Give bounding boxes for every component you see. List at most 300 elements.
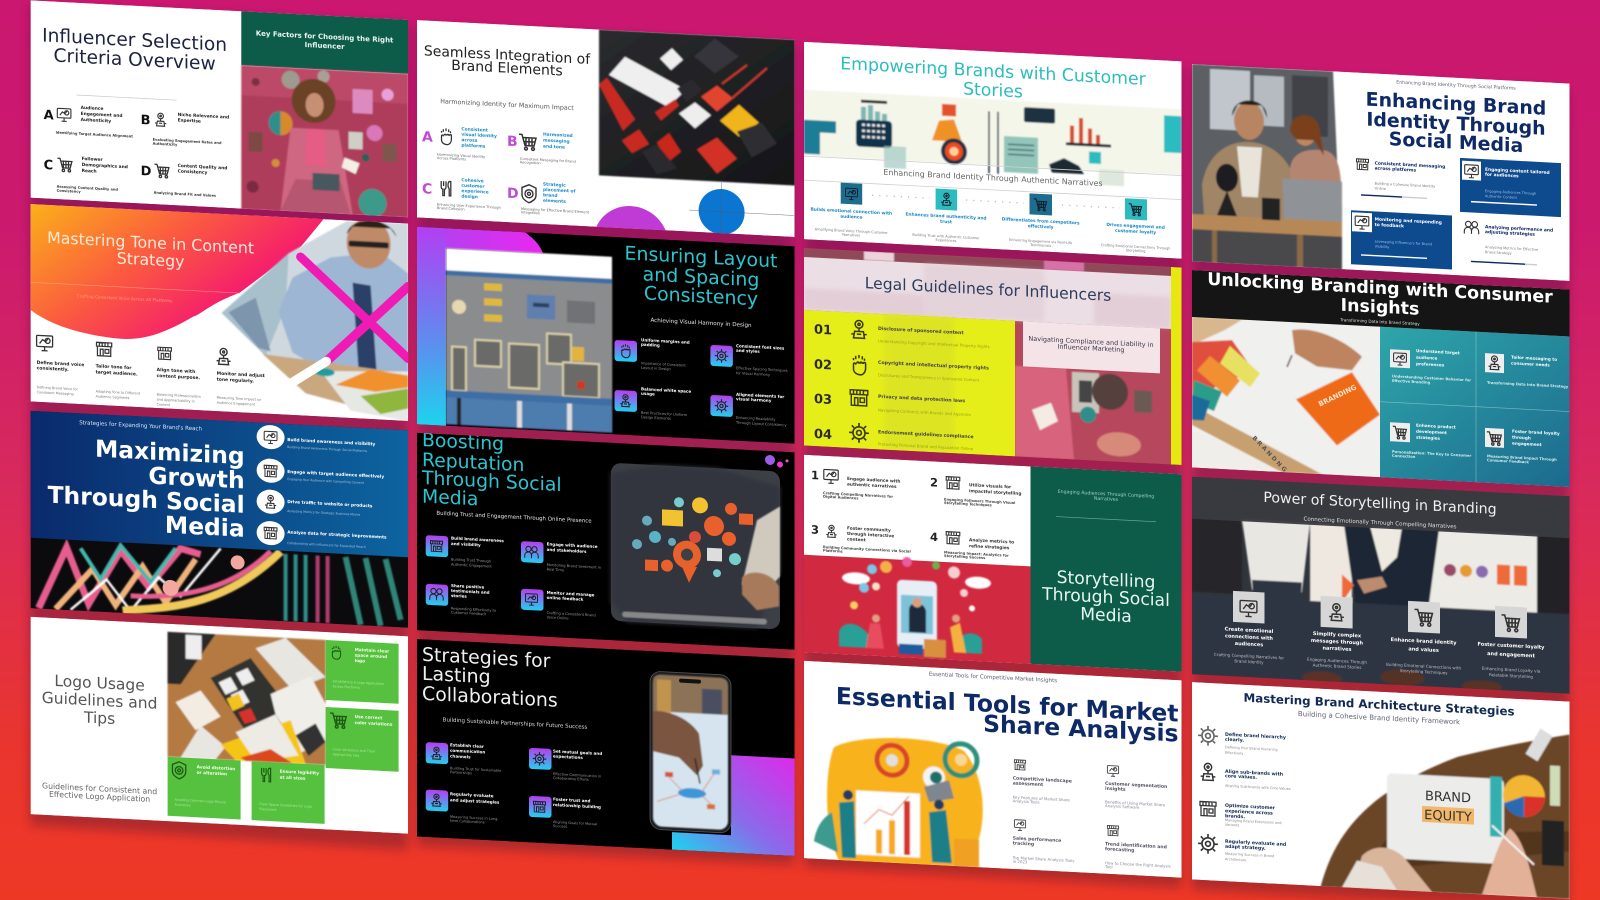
item B: B — [141, 113, 151, 128]
item 3: through interactive — [847, 531, 894, 539]
icon: smiley faces — [162, 555, 245, 596]
slide: Storytelling Through Social Media — [804, 455, 1182, 672]
item 1: Engage audience with — [847, 476, 900, 485]
item 2: Align sub-brands with — [1225, 769, 1283, 778]
item 4: visual harmony — [736, 396, 772, 403]
subtitle: Connecting Emotionally Through Compelling Narratives — [1304, 515, 1457, 530]
item 2 — [529, 747, 602, 783]
card 3: Leveraging Influencers for Brand — [1375, 239, 1432, 246]
decorative corner gradient — [672, 752, 794, 856]
card: maintain clear space: Establishing A Logo Application — [333, 679, 384, 686]
item 2 — [1105, 765, 1167, 811]
item D: Analyzing Brand Fit and Values — [154, 191, 216, 198]
title: Mastering Brand Architecture Strategies — [1244, 691, 1514, 719]
item A — [44, 103, 133, 139]
icon: store — [96, 342, 112, 356]
item D: elements — [543, 198, 566, 205]
item 2: Simplify complex — [1313, 631, 1362, 639]
card 4: adjusting strategies — [1485, 229, 1535, 238]
photo: faded influencer background — [804, 248, 1182, 465]
item 1: Authentic Engagement — [451, 562, 492, 569]
row 03: Navigating Contracts with Brands and Agencies — [878, 407, 971, 417]
item 2: and stakeholders — [547, 547, 587, 554]
item 1: Key Features of Market Share — [1013, 794, 1070, 802]
slide: Strategies for Lasting Collaborations — [417, 639, 794, 856]
item 1: connections with — [1225, 633, 1273, 642]
item 3: Personalization: The Key to Consumer — [1392, 450, 1471, 458]
row 04: Protecting Personal Brand and Reputation Online — [878, 441, 974, 451]
title: Strategies for — [422, 644, 551, 672]
row 03: Privacy and data protection laws — [878, 394, 965, 404]
title: Empowering Brands with Customer — [840, 54, 1147, 90]
icon: monitor — [1107, 765, 1119, 777]
band lines — [804, 156, 1182, 200]
title: Logo Usage — [54, 672, 145, 695]
item B: Niche Relevance and — [178, 112, 229, 121]
item C: Brand Cohesion — [437, 206, 465, 211]
item 3: Responding Effectively to — [451, 606, 496, 613]
header band — [1192, 477, 1570, 538]
item 3 — [1002, 192, 1080, 249]
icon: gear with bulb — [1198, 833, 1218, 854]
slide: Empowering Brands with Customer Stories — [804, 42, 1182, 259]
item 2 — [905, 187, 987, 245]
item 4: Measuring Success in Brand — [1225, 852, 1274, 858]
item 1: Uniform margins and — [641, 337, 690, 345]
item 4: Measuring Tone Impact on — [217, 396, 261, 402]
item 4 — [529, 795, 601, 831]
item 3: Drive traffic to website or products — [287, 499, 373, 509]
icon: shield — [522, 184, 536, 203]
subtitle: Enhancing Brand Identity Through Authentic Narratives — [883, 168, 1103, 188]
icon tile: gear — [529, 748, 552, 770]
item 4: Relatable Storytelling — [1489, 672, 1533, 679]
item 1 — [1198, 725, 1286, 758]
slide: Essential Tools for Market Share Analysis — [804, 661, 1182, 878]
subtitle: Building Trust and Engagement Through Online Presence — [436, 510, 592, 525]
accent strip — [1171, 267, 1182, 465]
item 1: Building Brand Awareness Through Social Platforms — [287, 445, 368, 453]
decorative gradient edges — [417, 227, 543, 431]
title: Insights — [1341, 296, 1419, 320]
card 1: Online — [1375, 186, 1386, 191]
icon tile: gear — [710, 345, 733, 367]
item C: Cohesive — [461, 177, 484, 184]
dotted connectors — [872, 195, 1120, 208]
item B — [507, 130, 576, 167]
icon cluster: social media icons — [632, 494, 753, 586]
item A: across — [461, 138, 478, 144]
item 3: Customer Feedback — [451, 610, 487, 616]
card: color variations: color variations — [355, 720, 393, 728]
item 1: Builds emotional connection with — [810, 207, 892, 217]
panel: yellow list — [804, 310, 1015, 456]
illustration: machines and charts — [804, 90, 1182, 189]
icon: hand — [854, 355, 866, 375]
item 3: Share positive — [451, 583, 484, 590]
icon: pin — [217, 348, 231, 365]
title: Media — [1080, 604, 1132, 627]
subtitle: Building Sustainable Partnerships for Future Success — [443, 716, 587, 731]
item D: Integration — [521, 210, 540, 215]
icon: store — [1014, 760, 1026, 770]
subtitle: Transforming Data Into Brand Strategy — [1339, 317, 1420, 326]
item 4: through — [1512, 435, 1531, 441]
item 2 — [256, 458, 384, 484]
card: avoid distortion — [168, 757, 241, 820]
photo: branding mockup — [1192, 317, 1380, 477]
item 3 — [426, 582, 496, 617]
callout: compliance box — [1023, 321, 1160, 373]
title: Media — [165, 511, 245, 543]
icon: cart — [57, 158, 72, 172]
item 1: authentic narratives — [847, 481, 897, 490]
item 3: and adjust strategies — [450, 797, 500, 805]
icon: people — [1464, 221, 1479, 234]
slide: Mastering Brand Architecture Strategies — [1192, 682, 1570, 900]
panel heading: Influencer — [305, 41, 345, 51]
card: ensure legibility: Clear Space Guidelines for Logo — [259, 802, 312, 809]
icon: hand — [442, 128, 451, 145]
title: Tips — [83, 708, 115, 728]
item 3: experience across — [1225, 808, 1273, 817]
icon: shirt — [850, 390, 868, 406]
item 2 — [710, 342, 788, 378]
card: color variations: Color Variations and Their — [333, 747, 376, 754]
item 4: customer loyalty — [1115, 228, 1156, 236]
title: Reputation — [422, 450, 524, 476]
item 4: Crafting Emotional Connections Through — [1101, 243, 1170, 251]
item 1: Defining Your Brand Hierarchy — [1225, 745, 1278, 752]
eyebrow: Essential Tools for Competitive Market Insights — [929, 671, 1057, 684]
card 1: Building a Cohesive Brand Identity — [1375, 181, 1435, 189]
item 1: clearly. — [1225, 737, 1244, 744]
item 1 — [614, 336, 690, 372]
item A — [422, 124, 497, 163]
subtitle: Building a Cohesive Brand Identity Framework — [1298, 710, 1461, 726]
item 2: narratives — [1323, 645, 1352, 653]
title: Through Social — [1041, 584, 1170, 611]
item 3 — [426, 789, 500, 825]
item 2: Benefits of Using Market Share — [1105, 799, 1166, 807]
item 1: Establish clear — [450, 742, 484, 749]
row 02: Disclosures and Transparency in Sponsored Content — [878, 372, 980, 383]
item D: Content Quality and — [178, 163, 227, 171]
title: Legal Guidelines for Influencers — [865, 274, 1111, 305]
icon tile: monitor — [1233, 591, 1264, 623]
panel: blue header — [31, 411, 408, 557]
item 4 — [217, 348, 266, 407]
icon tile: pin — [426, 789, 448, 812]
item 3: Measuring Success in Long- — [450, 815, 499, 821]
card: color variations: Use correct — [355, 714, 382, 721]
item 3: Top Market Share Analysis Tools — [1012, 855, 1074, 863]
icon: store — [158, 347, 171, 360]
card 4: Brand Strategy — [1485, 250, 1512, 256]
item 2: and styles — [736, 348, 760, 354]
card: avoid distortion: or alteration — [197, 770, 227, 777]
slide: Legal Guidelines for Influencers — [804, 248, 1182, 465]
item 4: Storytelling — [1126, 248, 1145, 253]
card 4 — [1464, 221, 1553, 266]
item 3: Foster community — [847, 525, 891, 534]
eyebrow: Enhancing Brand Identity Through Social Platforms — [1396, 80, 1516, 92]
item 2: Effective Communication in — [553, 772, 601, 779]
item 3 — [1390, 421, 1471, 462]
item 3: Testimonials — [1029, 243, 1051, 248]
item 2: trust — [940, 219, 952, 225]
item 3: 3 — [811, 523, 819, 537]
photo: tablet showing brand equity on wooden table — [1321, 717, 1570, 900]
photo: business team presenting — [1192, 517, 1570, 698]
item D: D — [507, 186, 519, 202]
item 4: Success — [553, 824, 567, 829]
item 4: Aligning Goals for Mutual — [553, 820, 597, 826]
card: maintain clear space: Across Platforms — [333, 684, 360, 690]
item 3: Managing Brand Extensions and — [1225, 818, 1282, 825]
slide: Mastering Tone in Content Strategy — [31, 201, 408, 421]
item 2: Engage with target audience effectively — [287, 469, 384, 480]
photo: man reviewing chart — [222, 211, 408, 421]
item 1: Define brand voice — [37, 360, 84, 368]
title: Ensuring Layout — [625, 242, 777, 272]
item 3: Connection — [1392, 454, 1416, 459]
item 3: term Collaborations — [450, 819, 485, 825]
slide: Enhancing Brand Identity Through Social Media — [1192, 64, 1570, 282]
item 3: Variants — [1225, 823, 1239, 827]
item 2: Tailor messaging to — [1511, 354, 1557, 362]
item A: Harmonizing Visual Identity — [437, 153, 485, 159]
tablet text — [1422, 789, 1474, 826]
item 2: messages through — [1311, 638, 1364, 647]
item 1 — [1390, 347, 1471, 387]
icon: store — [1356, 159, 1368, 170]
item 4: Monitor and adjust — [217, 371, 266, 379]
item 4: Foster trust and — [553, 797, 590, 803]
item 3: content purpose. — [157, 373, 200, 381]
slide: Logo Usage Guidelines and Tips — [31, 617, 408, 834]
item D: Messaging for Effective Brand Element — [521, 207, 590, 214]
icon: fork and knife — [441, 181, 451, 196]
eyebrow: Strategies for Expanding Your Brand's Reach — [79, 419, 203, 433]
item 4: Architecture — [1225, 857, 1246, 862]
item 2: for Visual Harmony — [736, 371, 770, 377]
icon: shield — [172, 761, 186, 779]
item 3 — [157, 347, 201, 409]
item B: Expertise — [178, 117, 201, 125]
row 02: Copyright and intellectual property rights — [878, 360, 989, 372]
photo: stationery flat lay — [599, 29, 795, 186]
title: Social Media — [1389, 128, 1523, 157]
item 1: 1 — [811, 468, 819, 482]
item 3: Content — [157, 403, 171, 407]
item 4: 4 — [930, 530, 938, 544]
item B: Consistent Messaging for Brand — [520, 157, 576, 164]
item A: Across Platforms — [437, 156, 466, 162]
subtitle: Achieving Visual Harmony in Design — [650, 317, 752, 329]
item A: A — [44, 108, 54, 123]
item 2: insights — [1105, 786, 1126, 793]
item 1: Competitive landscape — [1013, 775, 1072, 785]
item 2 — [521, 540, 601, 574]
subtitle: Guidelines for Consistent and — [42, 781, 157, 796]
item 4: engagement — [1512, 441, 1542, 447]
item B: Evaluating Engagement Rates and — [153, 138, 222, 145]
icon: monitor — [1014, 820, 1026, 831]
item 3: and Approachability in — [157, 398, 195, 403]
slide: Seamless Integration of Brand Elements — [417, 20, 795, 291]
row 01: Disclosure of sponsored content — [878, 326, 964, 336]
label on paper: BRANDNG — [1251, 435, 1289, 475]
item 4: Tool — [1104, 864, 1113, 869]
item 3: content — [847, 536, 866, 543]
item 4: Foster customer loyalty — [1478, 641, 1545, 651]
icon: gear — [849, 422, 869, 443]
item C — [422, 175, 501, 213]
icon tile: cart — [1390, 422, 1410, 442]
icon tile: monitor — [1390, 349, 1410, 368]
item 1: audience — [1416, 355, 1438, 361]
item 2: Engaging Followers Through Visual — [944, 497, 1015, 505]
item 2 — [930, 475, 1021, 509]
card: avoid distortion: Avoiding Common Logo Misuse — [175, 798, 226, 804]
card 2: Engaging Audiences Through — [1485, 189, 1536, 196]
title: Consistency — [644, 282, 758, 310]
item 4: Through Layout Consistency — [735, 421, 786, 427]
item 4: Foster brand loyalty — [1512, 429, 1560, 436]
item 3: Building Community Connections via Social — [823, 545, 911, 554]
title: Boosting — [422, 430, 504, 455]
icon: monitor — [264, 431, 277, 444]
item 3: Storytelling Techniques — [1400, 668, 1447, 675]
item 1 — [811, 468, 900, 503]
title: Seamless Integration of — [424, 43, 591, 68]
item 3: Balanced white space — [641, 386, 691, 394]
panel: green title — [1030, 466, 1182, 672]
item 2: Transforming Data Into Brand Strategy — [1487, 381, 1569, 389]
title: Maximizing — [95, 435, 245, 470]
decorative dots — [765, 455, 788, 468]
item 2: 2 — [930, 475, 938, 490]
item 1: Define brand hierarchy — [1225, 732, 1286, 741]
icon tile: monitor — [521, 589, 544, 611]
item 4: Regularly evaluate and — [1225, 839, 1286, 848]
icon tile: people — [426, 584, 448, 606]
item 4 — [930, 530, 1014, 562]
icon: cart — [330, 713, 346, 728]
icon: store — [1107, 825, 1119, 836]
item 2: Engage with audience — [547, 541, 598, 549]
illustration: team with chart and telescope — [814, 734, 983, 868]
icon: store — [264, 465, 277, 477]
item C: customer — [461, 183, 485, 190]
icon tile: monitor — [1462, 161, 1481, 181]
item 4: Enhancing Brand Loyalty via — [1482, 666, 1541, 674]
item 4: Crafting a Consistent Brand — [547, 611, 596, 617]
row 02 — [814, 353, 989, 383]
photo: creators with camera — [1192, 64, 1342, 270]
row 01: Understanding Copyright and Intellectual Property Rights — [878, 338, 990, 349]
item 1: channels — [450, 753, 471, 759]
title: Essential Tools for Market — [836, 682, 1178, 728]
item 4: Trend identification and — [1105, 841, 1167, 850]
item A: visual identity — [461, 132, 497, 140]
panel: green title: Narratives — [1094, 496, 1119, 503]
item 3: Balancing Professionalism — [157, 393, 201, 399]
item 3 — [1386, 600, 1462, 676]
item 2: consumer needs — [1511, 360, 1550, 368]
title: Influencer Selection — [42, 25, 227, 56]
icon tile: pin — [1321, 596, 1353, 629]
card: maintain clear space — [326, 640, 399, 704]
title: Guidelines and — [42, 689, 157, 713]
item 3: in 2023 — [1013, 859, 1028, 865]
icon: pin — [265, 495, 276, 508]
tablet text: EQUITY — [1424, 808, 1472, 825]
item 2: expectations — [553, 754, 583, 760]
item 4: Measuring Brand Impact Through — [1487, 454, 1557, 462]
item C: C — [44, 158, 53, 173]
callout: compliance box: Navigating Compliance and Liability in — [1028, 335, 1154, 349]
card 3: Monitoring and responding — [1375, 216, 1442, 226]
title: Unlocking Branding with Consumer — [1207, 270, 1553, 308]
item D — [142, 164, 228, 197]
icon tile: store — [426, 535, 448, 557]
item 1: Crafting Compelling Narratives for — [1214, 652, 1284, 660]
icon tile: pin — [936, 189, 957, 211]
title: Media — [422, 486, 478, 510]
icon: monitor — [57, 108, 71, 122]
item 1: Understanding Customer Behavior for — [1392, 374, 1471, 382]
item 1 — [426, 741, 501, 777]
photo: floor plan — [446, 248, 612, 433]
row 03: 03 — [814, 392, 832, 408]
card: ensure legibility: Placement — [259, 807, 277, 812]
item 4: and engagement — [1487, 651, 1535, 659]
item C: Reach — [82, 168, 97, 175]
item 2: Collaborative Efforts — [553, 776, 589, 782]
icon: store — [1200, 801, 1216, 816]
item 3: tracking — [1013, 840, 1034, 848]
item B: Authenticity — [153, 142, 178, 147]
item D: Strategic — [543, 182, 566, 189]
item 3: strategies — [1416, 435, 1440, 441]
item 3: Regularly evaluate — [450, 791, 494, 798]
item 1 — [257, 424, 376, 455]
title: Collaborations — [422, 683, 558, 712]
item 4: Storytelling Success — [944, 554, 985, 560]
photo: brand assets on desk — [168, 632, 326, 765]
icon tile: pin — [1485, 353, 1504, 373]
title: Strategy — [117, 248, 184, 271]
card: avoid distortion: Avoid distortion — [197, 764, 235, 772]
item 3: Analyzing Metrics for Strategic Business Moves — [287, 509, 361, 517]
item 2: Analysis Software — [1105, 803, 1140, 810]
item A: platforms — [461, 142, 486, 150]
item 2: Audience Segments — [96, 394, 130, 400]
card: maintain clear space: logo — [355, 658, 365, 664]
item 2: Real Time — [547, 567, 564, 572]
header band — [1192, 270, 1570, 337]
icon: gear — [1198, 725, 1218, 746]
item C: Assessing Content Quality and — [57, 185, 118, 192]
item 2: Consistent font sizes — [736, 343, 785, 351]
item 1: Partnerships — [450, 770, 472, 775]
item C: Demographics and — [82, 162, 128, 170]
card: ensure legibility: at all sizes — [280, 775, 306, 782]
card 1 — [1356, 159, 1445, 200]
item 4 — [710, 390, 786, 427]
